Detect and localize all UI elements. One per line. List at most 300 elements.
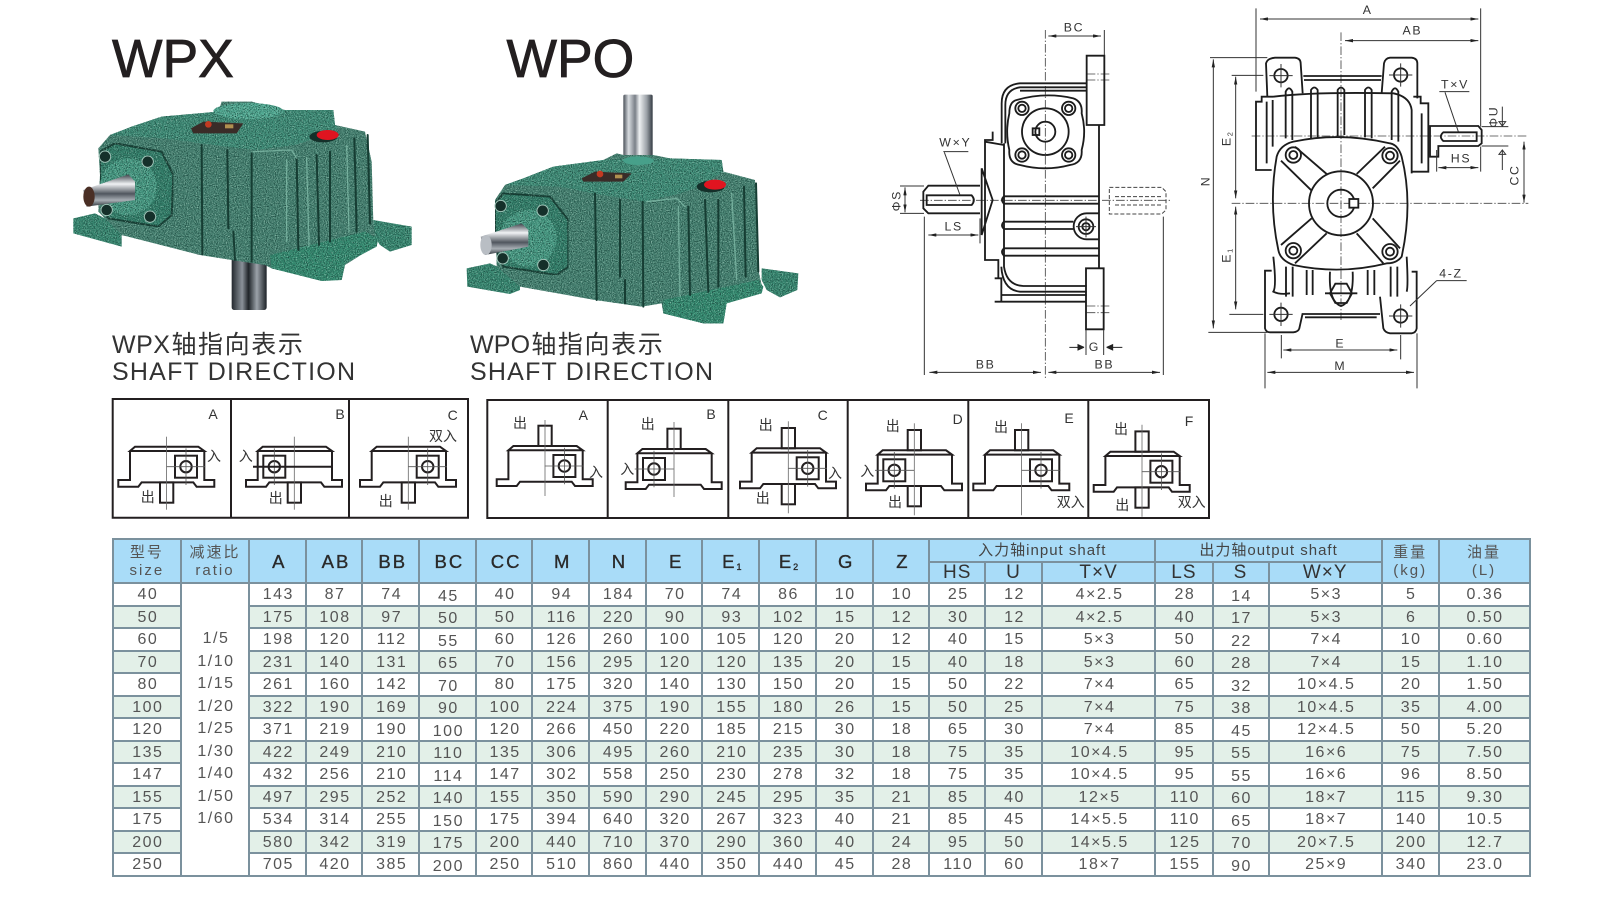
table body: 175 — [546, 676, 577, 693]
dimension labels: 4-Z — [1439, 267, 1463, 281]
labels: 出 — [756, 490, 770, 506]
input flange — [99, 143, 173, 227]
table body: 20 — [835, 676, 856, 693]
table body: 45 — [1004, 811, 1025, 828]
table body: 35 — [1004, 744, 1025, 761]
table body: 590 — [603, 789, 634, 806]
table body: 25×9 — [1305, 856, 1347, 873]
cast housing — [73, 102, 412, 281]
table body: 120 — [132, 721, 163, 738]
dimension labels: BB — [976, 358, 996, 372]
table body: 110 — [943, 856, 973, 873]
labels: C — [448, 407, 458, 423]
table body: 440 — [773, 856, 804, 873]
ΦU arrows — [1499, 107, 1506, 170]
technical drawing: side view — [890, 21, 1170, 378]
table body: 1/25 — [197, 720, 235, 737]
table body: 290 — [660, 789, 691, 806]
table body: 40 — [137, 586, 158, 603]
table body: 10×4.5 — [1070, 744, 1129, 761]
table body: 26 — [835, 699, 856, 716]
diagram A — [497, 420, 593, 496]
diagram C — [360, 437, 456, 510]
table body: 30 — [835, 744, 856, 761]
labels — [513, 406, 1206, 513]
dimension labels: ΦU — [1486, 106, 1500, 128]
table body: 100 — [132, 699, 163, 716]
table body: 10×4.5 — [1297, 699, 1355, 716]
dimension labels: LS — [944, 220, 963, 234]
table body: 175 — [263, 609, 294, 626]
table body: 306 — [546, 744, 577, 761]
labels: 入 — [239, 448, 253, 464]
specification table — [112, 538, 1531, 877]
table body: 30 — [1004, 721, 1025, 738]
table body: 322 — [263, 699, 294, 716]
table body: 156 — [546, 654, 577, 671]
labels: 出 — [888, 494, 902, 510]
table body: 50 — [1175, 631, 1195, 648]
table body: 105 — [716, 631, 747, 648]
labels: 出 — [269, 490, 283, 506]
dimension labels: AB — [1402, 24, 1422, 38]
table body: 110 — [1170, 811, 1200, 828]
diagram F — [1094, 425, 1190, 517]
table body: 80 — [137, 676, 158, 693]
table body: 23.0 — [1466, 856, 1504, 873]
table body: 50 — [495, 609, 515, 626]
table body: 18 — [891, 766, 912, 783]
table body: 432 — [263, 766, 294, 783]
table body: 200 — [433, 858, 464, 875]
table body: 10 — [891, 586, 912, 603]
table body: 45 — [835, 856, 856, 873]
table body: 14 — [1231, 588, 1252, 605]
table body: 70 — [495, 654, 515, 671]
table body: 155 — [489, 789, 521, 806]
caption: WPX shaft direction: SHAFT DIRECTION — [112, 358, 355, 386]
table body: 70 — [1231, 835, 1252, 852]
labels: 入 — [589, 464, 603, 480]
table body: 290 — [716, 834, 747, 851]
table body: 440 — [660, 856, 691, 873]
table body: 385 — [376, 856, 407, 873]
table body: 0.36 — [1466, 586, 1504, 603]
side flanges — [1256, 93, 1428, 294]
table body: 40 — [948, 631, 969, 648]
front cover — [1007, 95, 1084, 168]
table body: 74 — [381, 586, 402, 603]
table body: 90 — [438, 700, 459, 717]
table body: 12.7 — [1466, 834, 1504, 851]
table body: 96 — [1401, 766, 1422, 783]
extension lines — [1208, 8, 1508, 388]
table body: 640 — [603, 811, 634, 828]
table header: S — [1234, 562, 1247, 583]
table body: 200 — [132, 834, 163, 851]
table body: 160 — [319, 676, 351, 693]
dimension labels: T×V — [1441, 77, 1469, 91]
table body: 235 — [773, 744, 804, 761]
table body: 350 — [546, 789, 577, 806]
table body: 22 — [1231, 633, 1252, 650]
table body: 250 — [660, 766, 691, 783]
table body: 1/20 — [197, 698, 235, 715]
table body: 256 — [319, 766, 351, 783]
table body: 143 — [263, 586, 294, 603]
table body: 60 — [1175, 654, 1195, 671]
table body: 295 — [773, 789, 804, 806]
table body: 45 — [1231, 723, 1252, 740]
labels: 出 — [994, 419, 1008, 435]
table body: 510 — [546, 856, 577, 873]
labels: 出 — [141, 489, 155, 505]
dimension labels: N — [1198, 176, 1212, 186]
input flange — [495, 193, 568, 275]
table body: 320 — [603, 676, 634, 693]
table body: 18 — [891, 744, 912, 761]
table body: 10 — [835, 586, 856, 603]
table body: 12 — [1004, 586, 1025, 603]
table body: 28 — [1175, 586, 1195, 603]
dimension labels — [890, 21, 1114, 372]
table body: 210 — [376, 766, 407, 783]
table body: 142 — [376, 676, 407, 693]
table header: HS — [943, 562, 971, 583]
table body: 85 — [1175, 721, 1195, 738]
table body: 250 — [132, 856, 163, 873]
table body: 24 — [891, 834, 912, 851]
table body: 450 — [603, 721, 634, 738]
table header: E2 — [779, 551, 800, 572]
mounting feet — [1086, 56, 1104, 329]
table body: 50 — [1401, 721, 1422, 738]
photo: WPX gearbox — [73, 102, 412, 310]
labels: F — [1185, 413, 1193, 429]
table body: 120 — [660, 654, 691, 671]
table body: 184 — [603, 586, 634, 603]
table header: 减速比 — [189, 544, 240, 561]
table body: 40 — [1004, 789, 1025, 806]
table body: 140 — [1396, 811, 1427, 828]
table body: 302 — [546, 766, 577, 783]
labels: B — [335, 406, 345, 422]
table body: 340 — [1396, 856, 1427, 873]
table body: 422 — [263, 744, 294, 761]
table body: 12 — [1004, 609, 1025, 626]
table body: 25 — [948, 586, 969, 603]
table body: 5×3 — [1084, 654, 1115, 671]
table body: 28 — [891, 856, 912, 873]
table body: 86 — [778, 586, 799, 603]
table header: (L) — [1472, 562, 1496, 579]
mounting feet — [1265, 58, 1417, 333]
table body: 114 — [433, 768, 463, 785]
table body: 155 — [716, 699, 747, 716]
nameplate — [191, 121, 243, 133]
table body: 10.5 — [1466, 811, 1504, 828]
table body: 7×4 — [1084, 721, 1115, 738]
table body: 70 — [438, 678, 459, 695]
frame — [113, 399, 468, 518]
table body: 147 — [489, 766, 521, 783]
caption: WPO shaft direction: WPO轴指向表示 — [470, 331, 664, 359]
caption: WPO shaft direction — [470, 331, 713, 386]
table header: BB — [378, 551, 407, 572]
table body: 9.30 — [1466, 789, 1504, 806]
table body: 55 — [1231, 745, 1252, 762]
table body: 21 — [891, 811, 912, 828]
table body: 5×3 — [1310, 609, 1342, 626]
table body: 32 — [835, 766, 856, 783]
table body: 65 — [438, 655, 459, 672]
table body: 94 — [551, 586, 572, 603]
table body: 314 — [319, 811, 351, 828]
table body: 580 — [263, 834, 294, 851]
table body: 35 — [835, 789, 856, 806]
table header: W×Y — [1303, 562, 1348, 583]
table header: U — [1006, 562, 1021, 583]
table body: 110 — [433, 745, 463, 762]
dimension arrows — [1213, 19, 1524, 372]
diagram B — [246, 437, 342, 510]
centre lines — [920, 30, 1170, 378]
nameplate — [582, 171, 632, 182]
dimension labels: E — [1220, 136, 1234, 146]
table body: 50 — [1004, 834, 1025, 851]
table body: 155 — [132, 789, 163, 806]
table body: 50 — [137, 609, 158, 626]
table body: 180 — [773, 699, 804, 716]
centre lines — [1232, 32, 1528, 320]
labels: 出 — [759, 417, 773, 433]
table body: 140 — [433, 790, 464, 807]
table body: 45 — [438, 588, 459, 605]
table body: 342 — [319, 834, 351, 851]
table body: 5 — [1406, 586, 1416, 603]
shaft end — [83, 187, 95, 207]
table body: 50 — [438, 610, 459, 627]
table body: 224 — [546, 699, 577, 716]
G arrows — [1069, 345, 1122, 350]
table body: 10×4.5 — [1297, 676, 1355, 693]
shaft end — [480, 235, 492, 255]
table body: 190 — [376, 721, 407, 738]
table body: 20×7.5 — [1297, 834, 1355, 851]
output shaft pointing up — [623, 95, 653, 161]
labels: 出 — [886, 418, 900, 434]
table body: 1/10 — [197, 653, 235, 670]
labels: 出 — [513, 415, 527, 431]
dimension labels: M — [1334, 359, 1346, 373]
table body: 25 — [1004, 699, 1025, 716]
dimension labels: G — [1089, 340, 1100, 354]
housing ribs — [202, 135, 370, 262]
table body: 18×7 — [1079, 856, 1121, 873]
front cover — [1273, 137, 1407, 270]
table body: 1/50 — [197, 788, 235, 805]
panel: WPO shaft direction diagrams — [487, 400, 1209, 518]
table body: 4×2.5 — [1076, 609, 1124, 626]
table body: 28 — [1231, 655, 1252, 672]
table body: 87 — [325, 586, 345, 603]
table header: CC — [491, 551, 521, 572]
table body: 250 — [489, 856, 521, 873]
cover bolts — [1015, 102, 1075, 162]
table body: 319 — [376, 834, 407, 851]
labels: 入 — [207, 448, 221, 464]
table body: 115 — [1396, 789, 1426, 806]
table body: 558 — [603, 766, 634, 783]
hub and key — [1022, 108, 1069, 155]
dimension labels: W×Y — [939, 136, 971, 150]
table body: 18×7 — [1305, 811, 1347, 828]
table body: 15 — [1004, 631, 1025, 648]
hub and key — [1309, 171, 1373, 235]
table body: 260 — [603, 631, 634, 648]
diagram C — [740, 421, 836, 513]
table body: 375 — [603, 699, 634, 716]
table header: E1 — [722, 551, 744, 572]
table body: 135 — [489, 744, 521, 761]
dimension arrows — [905, 36, 1160, 372]
table body: 12×4.5 — [1297, 721, 1355, 738]
table body: 40 — [495, 586, 515, 603]
labels: 入 — [860, 463, 874, 479]
table body: 150 — [433, 813, 464, 830]
table body: 120 — [716, 654, 747, 671]
table header: G — [838, 551, 854, 572]
panel: WPX shaft direction diagrams — [113, 399, 468, 518]
table body: 100 — [433, 723, 464, 740]
table header: E — [669, 551, 683, 572]
table body: 75 — [948, 744, 969, 761]
table body: 495 — [603, 744, 634, 761]
table body: 130 — [716, 676, 747, 693]
table body: 30 — [948, 609, 969, 626]
table body: 497 — [263, 789, 294, 806]
table body: 65 — [948, 721, 969, 738]
table body: 60 — [495, 631, 515, 648]
drain plug — [1325, 272, 1357, 306]
table body: 75 — [1175, 699, 1195, 716]
table body: 360 — [773, 834, 804, 851]
drain plug — [1074, 213, 1099, 239]
dimension labels: HS — [1451, 152, 1471, 166]
table body: 7.50 — [1466, 744, 1504, 761]
table body: 15 — [835, 609, 856, 626]
table body: 10×4.5 — [1070, 766, 1129, 783]
table body: 60 — [1004, 856, 1025, 873]
labels — [141, 406, 458, 509]
dimension labels: ΦS — [890, 190, 904, 211]
red filler cap — [309, 130, 339, 142]
table body: 255 — [376, 811, 407, 828]
table body: 40 — [948, 654, 969, 671]
table body: 85 — [948, 811, 969, 828]
table header: (kg) — [1393, 562, 1427, 579]
table body: 7×4 — [1310, 631, 1342, 648]
table body: 155 — [1169, 856, 1201, 873]
frame — [487, 400, 1209, 518]
table header: AB — [322, 551, 350, 572]
dimension labels: 2 — [1226, 131, 1235, 136]
table body: 5×3 — [1084, 631, 1115, 648]
table body: 102 — [773, 609, 804, 626]
table body: 0.60 — [1466, 631, 1504, 648]
table body: 21 — [891, 789, 912, 806]
table body: 4.00 — [1466, 699, 1504, 716]
table body: 7×4 — [1084, 676, 1115, 693]
table body: 4×2.5 — [1076, 586, 1124, 603]
table body: 1/60 — [197, 810, 235, 827]
shaft collar — [623, 156, 654, 165]
labels: B — [706, 406, 716, 422]
table body: 14×5.5 — [1070, 834, 1129, 851]
table body: 260 — [660, 744, 691, 761]
table body: 80 — [495, 676, 515, 693]
table body: 15 — [1401, 654, 1422, 671]
table body: 60 — [137, 631, 158, 648]
table body: 126 — [546, 631, 577, 648]
dimension labels — [1198, 3, 1521, 373]
table header: LS — [1171, 562, 1197, 583]
table body: 185 — [716, 721, 747, 738]
labels: 入 — [620, 461, 634, 477]
table header: BC — [435, 551, 464, 572]
table body: 220 — [660, 721, 691, 738]
diagram E — [973, 423, 1069, 515]
title: WPX: WPX — [112, 30, 234, 89]
labels: 出 — [1114, 421, 1128, 437]
labels: 出 — [379, 493, 393, 509]
table body: 95 — [1175, 744, 1195, 761]
table body: 16×6 — [1305, 744, 1347, 761]
table body: 40 — [1175, 609, 1195, 626]
table body: 50 — [948, 676, 969, 693]
dashed double shaft — [1109, 187, 1166, 214]
table body: 90 — [1231, 858, 1252, 875]
table body: 135 — [132, 744, 163, 761]
table body: 100 — [660, 631, 691, 648]
table body: 40 — [835, 811, 856, 828]
table body: 116 — [547, 609, 577, 626]
dimension labels: A — [1363, 3, 1373, 17]
table body: 252 — [376, 789, 407, 806]
table body: 1.50 — [1466, 676, 1504, 693]
table body: 35 — [1004, 766, 1025, 783]
table body: 93 — [721, 609, 742, 626]
extension lines — [900, 30, 1163, 375]
table body: 147 — [132, 766, 163, 783]
table body: 1.10 — [1466, 654, 1504, 671]
table body: 266 — [546, 721, 577, 738]
housing outline — [982, 83, 1099, 302]
table header: A — [272, 551, 286, 572]
table header: Z — [896, 551, 910, 572]
labels: E — [1064, 410, 1074, 426]
diagram B — [626, 422, 722, 497]
table body: 50 — [948, 699, 969, 716]
table body: 860 — [603, 856, 634, 873]
table header: 重量 — [1393, 544, 1427, 561]
table body: 131 — [376, 654, 407, 671]
labels: 出 — [641, 416, 655, 432]
table body: 140 — [660, 676, 691, 693]
table body: 210 — [716, 744, 747, 761]
table body: 323 — [773, 811, 804, 828]
table body: 0.50 — [1466, 609, 1504, 626]
